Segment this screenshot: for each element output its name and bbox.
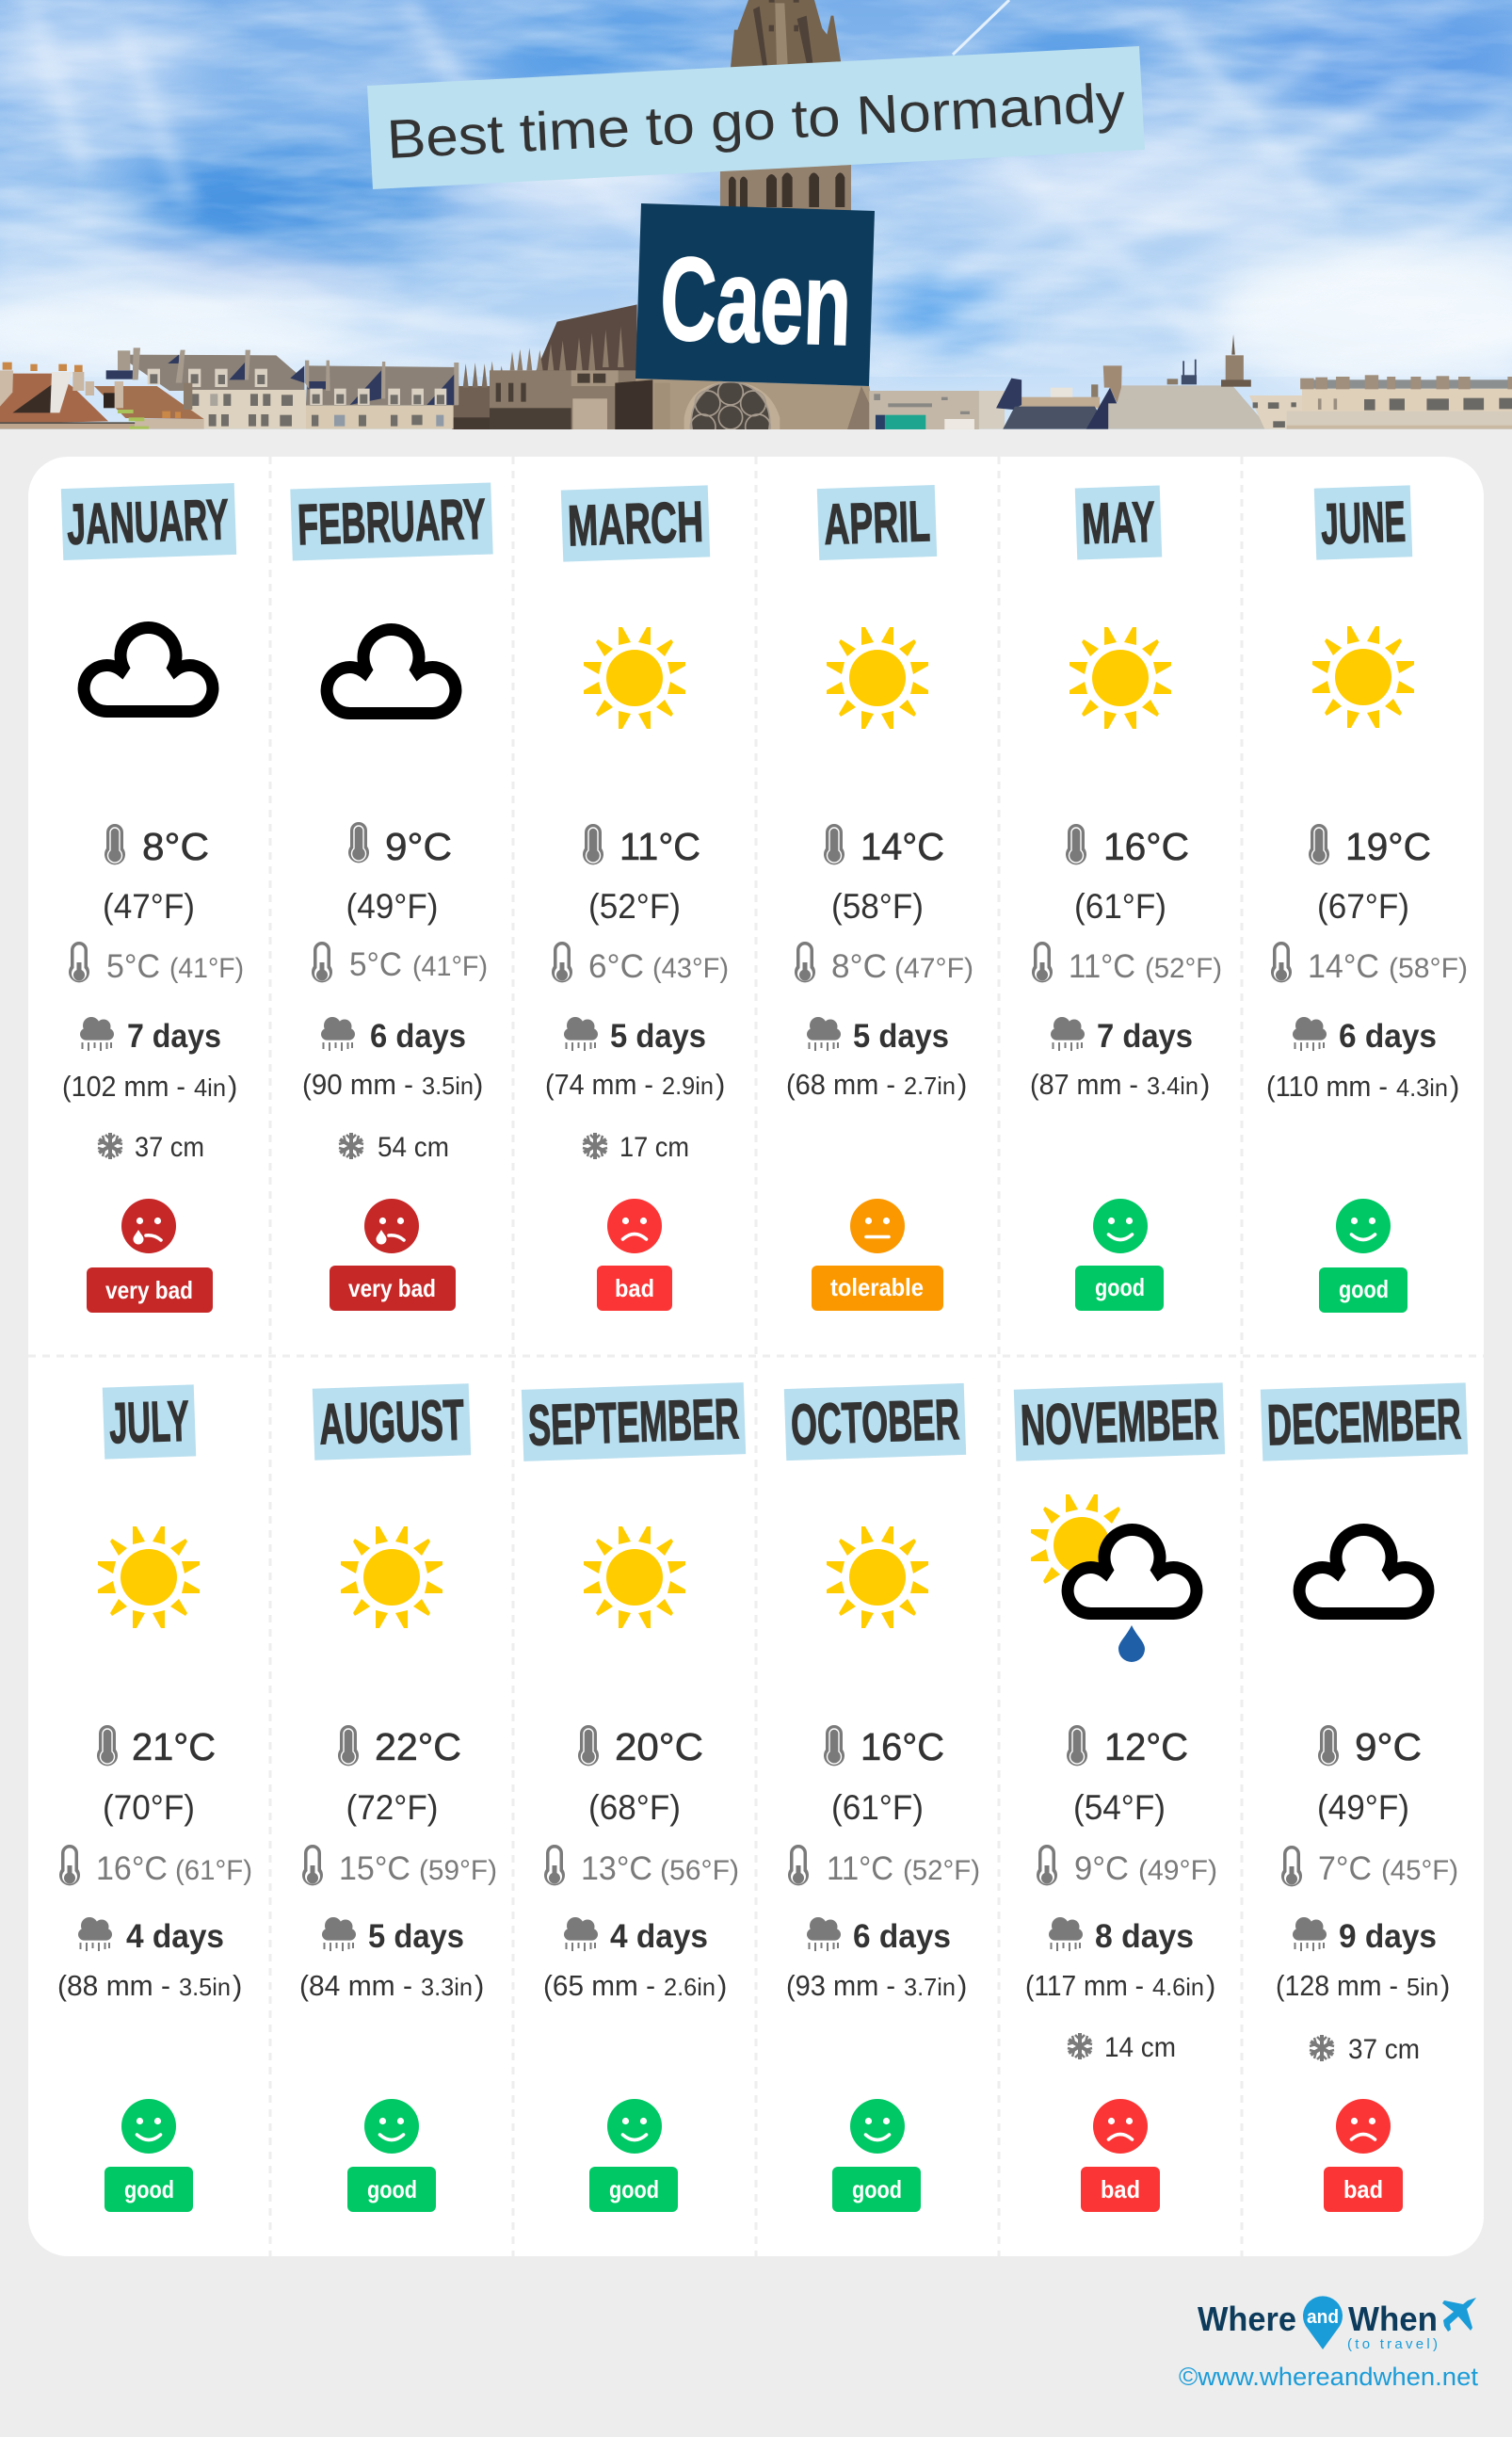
snowfall: 37 cm: [1348, 2034, 1420, 2065]
rating: tolerable: tolerable: [830, 1273, 924, 1301]
month: June: [1266, 485, 1468, 1313]
high temperature fahrenheit: (61°F): [1074, 887, 1166, 926]
low temperature: 15°C: [339, 1850, 410, 1887]
low temperature: (49°F): [1138, 1855, 1217, 1886]
rain days: 8 days: [1095, 1918, 1194, 1955]
rainfall: [1025, 1969, 1215, 2002]
low temperature: [312, 942, 488, 983]
low temperature: [1037, 1845, 1217, 1887]
rating: bad: bad: [1101, 2175, 1140, 2203]
month: September: [522, 1382, 746, 2212]
low temperature: (47°F): [894, 953, 973, 984]
rainfall: [302, 1068, 483, 1101]
snowfall: [98, 1132, 204, 1163]
rating: good: [589, 2099, 678, 2212]
high temperature: [105, 824, 209, 868]
snowfall: 17 cm: [619, 1132, 689, 1163]
heading: March: [561, 485, 710, 562]
rainfall: ): [233, 1969, 242, 2002]
rainfall: (93 mm -: [786, 1969, 895, 2002]
title banner: Best time to go to Normandy: [385, 72, 1127, 170]
rating: good: [832, 2099, 921, 2212]
rainfall: ): [1206, 1969, 1215, 2002]
rain days: 9 days: [1339, 1918, 1437, 1955]
heading: May: [1075, 486, 1162, 559]
icon: cloud: [84, 628, 213, 712]
high temperature: [1066, 824, 1189, 868]
high temperature: [1309, 824, 1431, 868]
low temperature: (41°F): [169, 953, 244, 984]
low temperature: (56°F): [660, 1855, 739, 1886]
heading: February: FEBRUARY: [297, 487, 487, 557]
heading: January: [61, 483, 236, 560]
low temperature: (52°F): [903, 1855, 980, 1886]
high temperature: [338, 1725, 461, 1768]
rainfall: ): [1200, 1068, 1210, 1101]
heading: June: JUNE: [1320, 490, 1407, 556]
heading: November: NOVEMBER: [1020, 1387, 1219, 1457]
low temperature: 16°C: [96, 1850, 168, 1887]
icon: sun: [341, 1526, 442, 1628]
high temperature fahrenheit: (70°F): [103, 1788, 195, 1827]
low temperature: (52°F): [1145, 953, 1222, 984]
rainfall: [57, 1969, 242, 2002]
rainfall: (102 mm -: [62, 1070, 185, 1103]
high temperature: 16°C: [861, 1725, 944, 1768]
low temperature: [59, 1845, 252, 1887]
high temperature: 11°C: [619, 825, 700, 868]
high temperature: 14°C: [861, 825, 944, 868]
rainfall: [786, 1068, 967, 1101]
high temperature fahrenheit: (49°F): [346, 887, 439, 926]
rainfall: [786, 1969, 967, 2002]
icon: sun: [584, 1526, 685, 1628]
rating: good: [347, 2099, 436, 2212]
heading: November: [1014, 1382, 1225, 1461]
low temperature: [544, 1845, 739, 1887]
city banner: Caen: [658, 232, 853, 370]
high temperature: [578, 1725, 703, 1768]
cathedral body: [452, 304, 979, 460]
rainfall: 3.3in: [421, 1973, 473, 2001]
icon: sun: [827, 1526, 928, 1628]
rain days: 5 days: [853, 1018, 949, 1055]
high temperature: 9°C: [1355, 1725, 1422, 1768]
rainfall: (68 mm -: [786, 1068, 895, 1101]
snowfall: 14 cm: [1104, 2032, 1176, 2063]
rating: good: good: [852, 2175, 902, 2203]
rainfall: 3.4in: [1147, 1072, 1198, 1100]
high temperature: 20°C: [615, 1725, 703, 1768]
rating: bad: [1081, 2099, 1160, 2212]
rain days: 4 days: [126, 1918, 224, 1955]
title banner: [367, 46, 1145, 189]
low temperature: 5°C: [349, 946, 402, 983]
high temperature fahrenheit: (72°F): [346, 1788, 439, 1827]
high temperature: 8°C: [142, 825, 209, 868]
rainfall: (110 mm -: [1266, 1070, 1388, 1103]
month: February: [290, 482, 493, 1311]
heading: October: OCTOBER: [790, 1387, 960, 1457]
rain days: 7 days: [1097, 1018, 1193, 1055]
icon: sun: [584, 627, 685, 729]
high temperature fahrenheit: (68°F): [588, 1788, 681, 1827]
low temperature: (59°F): [419, 1855, 497, 1886]
month: March: [545, 485, 729, 1311]
high temperature: 12°C: [1104, 1725, 1188, 1768]
rating: bad: [1324, 2099, 1403, 2212]
high temperature: 9°C: [385, 825, 452, 868]
rating: good: good: [1339, 1275, 1389, 1303]
high temperature: [348, 822, 452, 868]
left rooftops: [0, 347, 458, 429]
snowfall: 54 cm: [378, 1132, 449, 1163]
high temperature fahrenheit: (47°F): [103, 887, 195, 926]
icon: sun: [1070, 627, 1171, 729]
rainfall: 4in: [194, 1073, 226, 1102]
high temperature: 16°C: [1103, 825, 1189, 868]
snowfall: 37 cm: [135, 1132, 204, 1163]
rain days: [321, 1017, 466, 1055]
rating: bad: bad: [615, 1274, 654, 1302]
high temperature: 21°C: [132, 1725, 216, 1768]
heading: March: MARCH: [567, 490, 704, 557]
month: October: [784, 1383, 980, 2212]
rating: very bad: very bad: [105, 1276, 193, 1304]
low temperature: 14°C: [1308, 948, 1379, 985]
rain days: 6 days: [370, 1018, 466, 1055]
high temperature: [97, 1725, 216, 1768]
rain days: [322, 1917, 464, 1955]
low temperature: (58°F): [1389, 953, 1468, 984]
rainfall: ): [957, 1068, 967, 1101]
rating: bad: bad: [1343, 2175, 1383, 2203]
rating: bad: [597, 1199, 672, 1311]
high temperature fahrenheit: (67°F): [1317, 887, 1409, 926]
month: December: [1261, 1382, 1468, 2212]
rating: good: [1319, 1199, 1407, 1313]
heading: April: [817, 485, 937, 560]
rain days: 5 days: [368, 1918, 464, 1955]
rainfall: ): [228, 1070, 237, 1103]
high temperature fahrenheit: (49°F): [1317, 1788, 1409, 1827]
rain days: [807, 1917, 951, 1955]
rain days: [564, 1017, 706, 1055]
rainfall: ): [474, 1068, 483, 1101]
heading: February: [290, 482, 493, 561]
logo: Where and When: When: [1348, 2300, 1438, 2338]
rainfall: ): [1440, 1969, 1450, 2002]
rating: good: good: [1095, 1273, 1145, 1301]
rainfall: ): [475, 1969, 484, 2002]
right rooftops: [979, 334, 1512, 429]
icon: cloud: [1299, 1530, 1428, 1614]
rainfall: (84 mm -: [299, 1969, 412, 2002]
snowfall: [339, 1132, 449, 1163]
rainfall: [1266, 1070, 1459, 1103]
high temperature fahrenheit: (52°F): [588, 887, 681, 926]
rainfall: (117 mm -: [1025, 1969, 1144, 2002]
logo: Where and When: [1198, 2296, 1476, 2352]
icon: cloud: [327, 630, 456, 714]
high temperature: 19°C: [1345, 825, 1431, 868]
high temperature fahrenheit: (54°F): [1073, 1788, 1166, 1827]
rainfall: ): [1450, 1070, 1459, 1103]
rainfall: 2.6in: [664, 1973, 716, 2001]
rating: very bad: [330, 1199, 456, 1311]
heading: January: JANUARY: [66, 487, 230, 557]
website credit: ©www.whereandwhen.net: [1179, 2363, 1478, 2391]
panel: monthly calendar: [28, 457, 1484, 2256]
rain days: 5 days: [610, 1018, 706, 1055]
rating: good: [1075, 1199, 1164, 1311]
rain days: 6 days: [853, 1918, 951, 1955]
icon: sun behind cloud with rain drop: [1031, 1494, 1197, 1662]
high temperature: 22°C: [375, 1725, 461, 1768]
low temperature: 6°C: [588, 948, 644, 985]
icon: sun: [1312, 626, 1414, 728]
heading: May: MAY: [1081, 490, 1156, 556]
high temperature: [824, 824, 944, 868]
rain days: [1049, 1917, 1194, 1955]
high temperature: [824, 1725, 944, 1768]
rainfall: [1030, 1068, 1210, 1101]
rating: very bad: very bad: [348, 1274, 436, 1302]
rainfall: (88 mm -: [57, 1969, 170, 2002]
low temperature: [302, 1845, 497, 1887]
low temperature: 11°C: [827, 1850, 893, 1887]
rainfall: 3.5in: [179, 1973, 231, 2001]
rain days: 7 days: [127, 1018, 221, 1055]
high temperature fahrenheit: (58°F): [831, 887, 924, 926]
rainfall: ): [716, 1068, 725, 1101]
low temperature: 8°C: [831, 948, 887, 985]
rainfall: [545, 1068, 725, 1101]
rainfall: (87 mm -: [1030, 1068, 1138, 1101]
month: July: [57, 1384, 252, 2212]
heading: August: [313, 1383, 471, 1461]
heading: June: [1314, 485, 1412, 560]
rainfall: 3.7in: [904, 1973, 956, 2001]
rain days: [1293, 1017, 1437, 1055]
month: April: [786, 485, 973, 1311]
rain days: [78, 1917, 224, 1955]
logo: Where and When: and: [1307, 2307, 1339, 2328]
high temperature fahrenheit: (61°F): [831, 1788, 924, 1827]
heading: August: AUGUST: [318, 1387, 465, 1457]
heading: April: APRIL: [823, 489, 931, 557]
icon: sun: [827, 627, 928, 729]
rainfall: (90 mm -: [302, 1068, 413, 1101]
rating: good: good: [609, 2175, 659, 2203]
month: August: [299, 1383, 497, 2212]
rating: good: [105, 2099, 193, 2212]
rain days: 4 days: [610, 1918, 708, 1955]
high temperature: [1318, 1725, 1422, 1768]
heading: September: SEPTEMBER: [527, 1386, 740, 1458]
rainfall: 4.3in: [1396, 1073, 1448, 1102]
rainfall: (128 mm -: [1276, 1969, 1398, 2002]
rainfall: ): [717, 1969, 727, 2002]
rain days: [1293, 1917, 1437, 1955]
low temperature: [788, 1845, 980, 1887]
heading: October: [784, 1383, 966, 1461]
high temperature: [583, 824, 700, 868]
rainfall: [543, 1969, 727, 2002]
low temperature: [795, 942, 973, 985]
tower spire: [720, 0, 851, 214]
rain days: [80, 1017, 221, 1055]
low temperature: (45°F): [1381, 1855, 1458, 1886]
heading: September: [522, 1382, 746, 1461]
low temperature: 9°C: [1074, 1850, 1129, 1887]
heading: July: JULY: [108, 1389, 190, 1455]
rainfall: ): [957, 1969, 967, 2002]
snowfall: [1068, 2032, 1176, 2063]
rainfall: 5in: [1407, 1973, 1439, 2001]
low temperature: 7°C: [1318, 1850, 1372, 1887]
rainfall: 2.9in: [662, 1072, 714, 1100]
low temperature: 11°C: [1069, 948, 1135, 985]
rainfall: 2.7in: [904, 1072, 956, 1100]
rating: good: good: [124, 2175, 174, 2203]
low temperature: (61°F): [175, 1855, 252, 1886]
low temperature: [552, 942, 729, 985]
logo: Where and When: (to travel): [1347, 2336, 1438, 2352]
snowfall: [1310, 2034, 1420, 2065]
rainfall: 3.5in: [422, 1072, 474, 1100]
rating: good: good: [367, 2175, 417, 2203]
rain days: [807, 1017, 949, 1055]
low temperature: [69, 942, 244, 985]
logo: Where and When: Where: [1198, 2300, 1296, 2338]
low temperature: 13°C: [581, 1850, 652, 1887]
month: January: [61, 483, 244, 1313]
rain days: [1051, 1017, 1193, 1055]
heading: July: [103, 1384, 196, 1460]
rainfall: [299, 1969, 484, 2002]
low temperature: (43°F): [652, 953, 729, 984]
rating: tolerable: [812, 1199, 943, 1311]
month: November: [1014, 1382, 1225, 2212]
rainfall: (74 mm -: [545, 1068, 653, 1101]
low temperature: (41°F): [412, 951, 488, 982]
rainfall: 4.6in: [1152, 1973, 1204, 2001]
rain days: 6 days: [1339, 1018, 1437, 1055]
rating: very bad: [87, 1199, 213, 1313]
month: May: [1030, 486, 1222, 1311]
rainfall: (65 mm -: [543, 1969, 655, 2002]
low temperature: [1032, 942, 1222, 985]
icon: sun: [98, 1526, 200, 1628]
high temperature: [1067, 1725, 1188, 1768]
header photo: sky and Caen skyline: [0, 0, 1512, 460]
low temperature: [1271, 942, 1468, 985]
snowfall: [583, 1132, 689, 1163]
low temperature: 5°C: [106, 948, 160, 985]
city banner: [635, 203, 875, 386]
low temperature: [1281, 1846, 1458, 1887]
rain days: [564, 1917, 708, 1955]
